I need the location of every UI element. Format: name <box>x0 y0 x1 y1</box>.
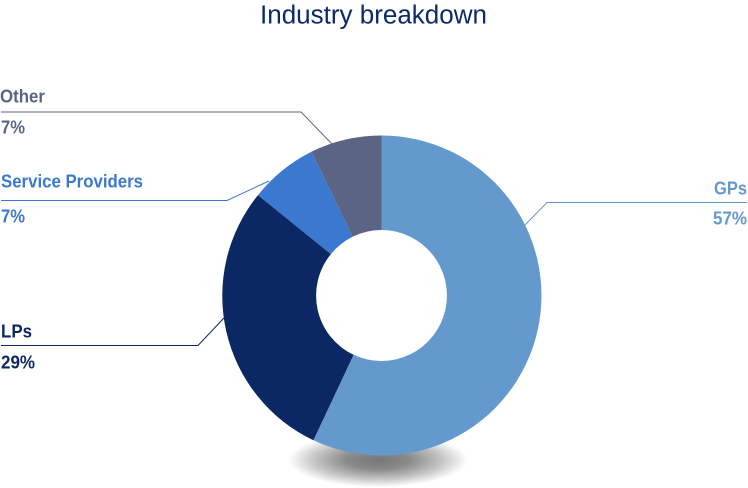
label: Other 7%: Other <box>0 86 45 106</box>
leader line: LPs <box>1 318 224 346</box>
label: Service Providers 7% <box>1 172 269 226</box>
leader line: Other <box>1 112 332 144</box>
label: Other 7%: 7% <box>1 118 25 138</box>
leader line: GPs <box>525 202 747 225</box>
label: Service Providers 7%: 7% <box>1 206 25 226</box>
slice: Service Providers 7% <box>258 152 353 254</box>
label: LPs 29%: LPs <box>1 322 32 342</box>
donut chart <box>222 136 541 455</box>
leader line: Service Providers <box>1 181 269 200</box>
slice: GPs 57% <box>313 136 541 455</box>
label: LPs 29% <box>1 318 224 372</box>
title: Industry breakdown <box>260 2 487 30</box>
pie shadow <box>288 433 468 487</box>
slice: Other 7% <box>311 136 382 237</box>
label: LPs 29%: 29% <box>1 352 35 372</box>
label: Service Providers 7%: Service Providers <box>1 172 143 192</box>
label: GPs 57% <box>525 178 747 228</box>
label: Other 7% <box>0 86 332 144</box>
slice: LPs 29% <box>222 195 354 440</box>
label: GPs 57%: 57% <box>713 208 747 228</box>
